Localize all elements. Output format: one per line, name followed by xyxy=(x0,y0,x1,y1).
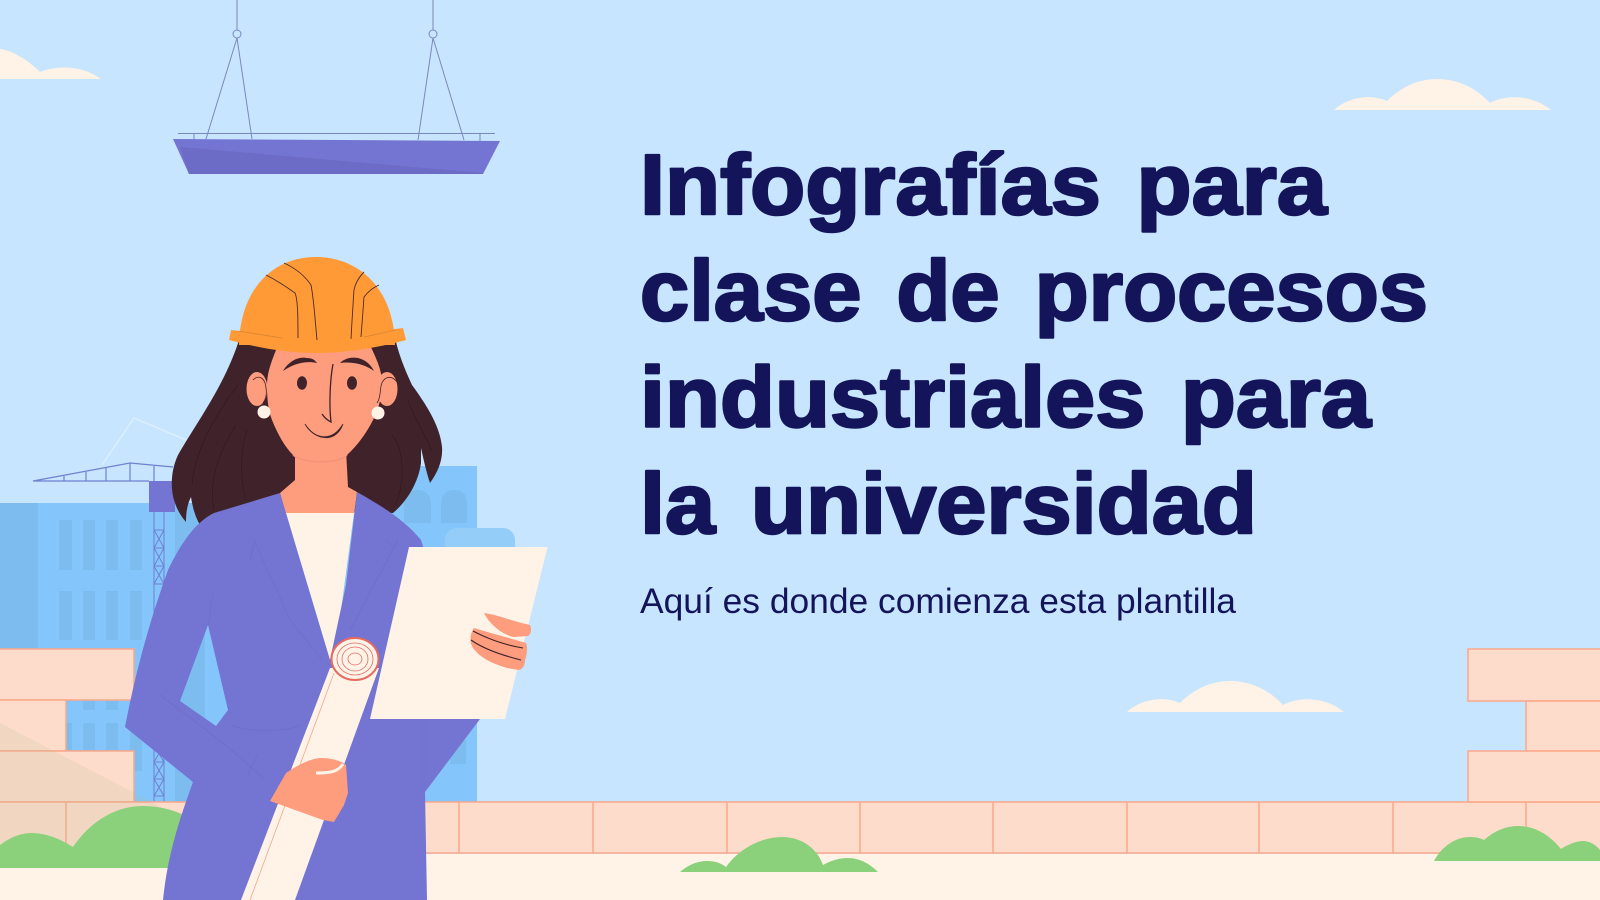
title: Infografías para xyxy=(640,138,1328,233)
subtitle: Aquí es donde comienza esta plantilla xyxy=(640,582,1237,621)
bush: left xyxy=(0,806,190,868)
facial features xyxy=(253,358,397,462)
earrings xyxy=(258,406,384,420)
title xyxy=(640,138,1428,552)
title: clase de procesos xyxy=(640,244,1428,339)
hand on blueprint xyxy=(270,758,348,822)
cloud: lower right xyxy=(1127,681,1344,712)
background building: left xyxy=(0,503,438,806)
hanging steel beam xyxy=(173,0,500,174)
ground xyxy=(0,854,1600,900)
ears xyxy=(246,372,398,406)
title: industriales para xyxy=(640,350,1372,446)
brick wall: bottom course xyxy=(0,802,1600,853)
face xyxy=(267,345,382,465)
hair xyxy=(172,340,442,525)
cloud: top left xyxy=(0,49,101,79)
wall shadow xyxy=(0,723,200,853)
neck xyxy=(280,450,357,515)
clipboard xyxy=(370,528,548,719)
hard hat xyxy=(229,257,406,353)
white shirt xyxy=(286,513,354,660)
cloud: top right xyxy=(1334,79,1551,110)
brick wall: right stack xyxy=(1468,649,1600,802)
background building: right xyxy=(395,466,477,806)
background crane xyxy=(33,418,186,805)
jacket xyxy=(125,492,480,900)
rolled blueprint xyxy=(241,638,379,900)
title: la universidad xyxy=(640,457,1257,552)
bush: middle xyxy=(680,837,878,872)
woman engineer xyxy=(125,257,548,900)
hand on clipboard xyxy=(470,613,531,670)
bush: right xyxy=(1434,826,1600,861)
hair strands xyxy=(192,385,432,510)
brick wall: left stack xyxy=(0,649,134,802)
